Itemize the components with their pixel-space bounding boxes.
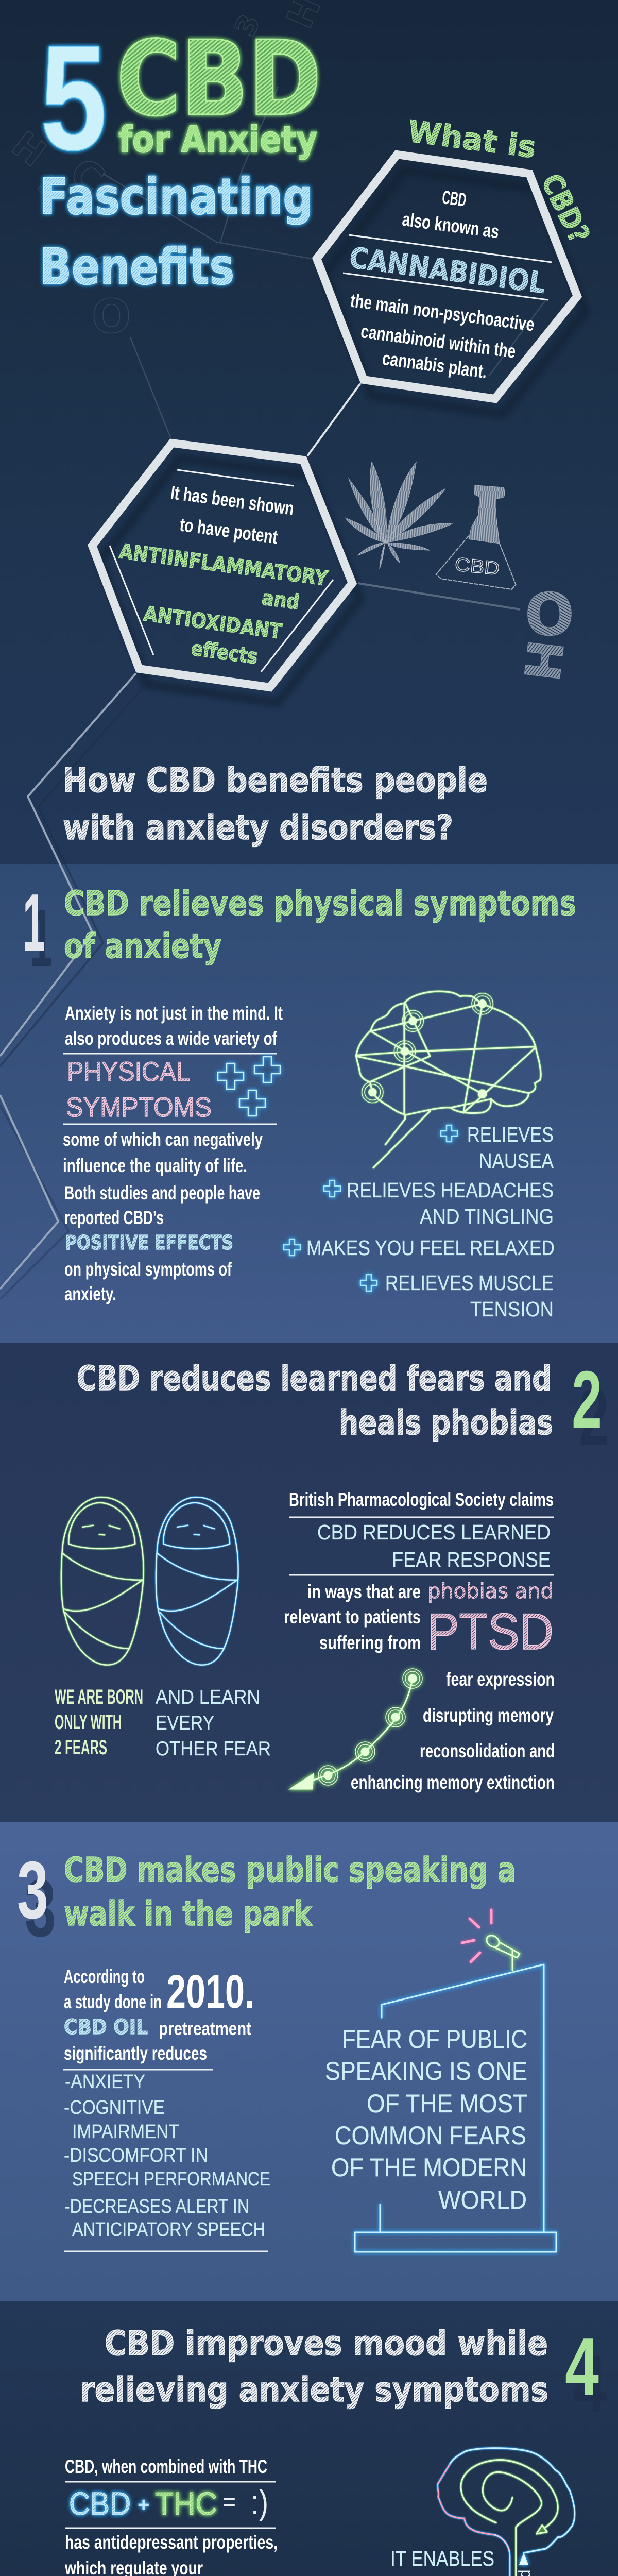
number 3: 3	[17, 1845, 48, 1936]
baby captions: ONLY WITH	[55, 1711, 122, 1734]
relief list: RELIEVES HEADACHES	[347, 1178, 554, 1202]
baby captions: OTHER FEAR	[156, 1738, 271, 1760]
title fascinating: Fascinating	[40, 168, 313, 226]
number 1: 1	[23, 877, 45, 968]
definition text: CANNABIDIOL	[348, 241, 547, 300]
icon: green swaddled baby	[61, 1497, 144, 1665]
number 1: 1	[30, 893, 53, 984]
reduced symptoms list: -DECREASES ALERT IN	[64, 2196, 249, 2217]
number 4: 4	[573, 2339, 607, 2430]
panel: header and what is CBD	[0, 0, 618, 864]
baby captions	[55, 1686, 271, 1760]
British Pharmacological Society claim	[284, 1489, 554, 1660]
number 4: 4	[565, 2321, 599, 2412]
number 2: 2	[572, 1354, 602, 1445]
CBD plus THC equation: CBD, when combined with THC	[65, 2456, 267, 2477]
relief list: AND TINGLING	[420, 1205, 554, 1228]
hexagon shadows	[100, 170, 585, 703]
reduced symptoms list: -DISCOMFORT IN	[64, 2145, 208, 2166]
body text 1: some of which can negatively	[63, 1129, 263, 1150]
relief list: TENSION	[470, 1297, 554, 1321]
potent effects text: ANTIINFLAMMATORY	[118, 539, 330, 591]
British Pharmacological Society claim: phobias and	[427, 1580, 554, 1603]
icon: brain with mood pathway	[438, 2448, 575, 2576]
heading 2: heals phobias	[339, 1403, 553, 1443]
relief list	[284, 1123, 555, 1321]
heading 1: of anxiety	[64, 926, 221, 966]
icon: CBD oil flask: CBD	[454, 553, 501, 579]
definition text: cannabinoid within the	[359, 320, 517, 362]
icon: podium	[355, 1964, 556, 2252]
baby captions: AND LEARN	[156, 1686, 260, 1708]
faint molecule letters	[4, 0, 329, 344]
body text 1: influence the quality of life.	[63, 1155, 247, 1176]
study text: a study done in	[64, 1991, 162, 2012]
definition text: the main non-psychoactive	[349, 290, 536, 335]
antidepressant text: has antidepressant properties,	[65, 2532, 278, 2553]
title for anxiety: for Anxiety	[118, 118, 317, 161]
British Pharmacological Society claim: FEAR RESPONSE	[392, 1548, 551, 1571]
reduced symptoms list	[64, 2071, 270, 2241]
potent effects text: to have potent	[179, 514, 279, 548]
CBD plus THC equation: THC	[155, 2486, 217, 2522]
what is CBD heading: CBD?	[534, 169, 596, 248]
icon: blue swaddled baby	[156, 1497, 238, 1665]
title CBD: CBD	[116, 19, 321, 139]
podium fear text: OF THE MOST	[367, 2089, 527, 2118]
antidepressant text	[64, 2532, 278, 2576]
heading 2	[77, 1359, 553, 1443]
panel: benefit 2 learned fears	[0, 1343, 618, 1822]
hydroxyl group OH: H	[512, 637, 573, 684]
body text 1: on physical symptoms of	[64, 1259, 232, 1280]
CBD plus THC equation: CBD	[69, 2486, 131, 2522]
icon: cannabis leaf	[345, 462, 452, 569]
mood arrows	[519, 2553, 530, 2576]
memory effects timeline: fear expression	[446, 1669, 555, 1690]
icon: microphone	[485, 1933, 520, 1970]
connector between hexagons	[307, 383, 360, 456]
main question heading: with anxiety disorders?	[63, 808, 453, 848]
British Pharmacological Society claim: relevant to patients	[284, 1606, 421, 1628]
panel: benefit 4 mood	[0, 2301, 618, 2576]
faint molecule letters: 3	[32, 169, 65, 205]
green spirals and arrows	[461, 2460, 558, 2576]
CBD plus THC equation: =	[222, 2488, 236, 2516]
baby captions: WE ARE BORN	[55, 1686, 143, 1708]
hexagon inner rules	[110, 470, 333, 672]
body text 1: Both studies and people have	[64, 1182, 260, 1204]
reduced symptoms list: ANTICIPATORY SPEECH	[72, 2219, 265, 2241]
icon: CBD oil flask	[436, 485, 516, 589]
British Pharmacological Society claim: PTSD	[427, 1603, 554, 1660]
relief list: MAKES YOU FEEL RELAXED	[306, 1236, 555, 1260]
definition text: CBD	[441, 187, 468, 211]
glowing timeline	[291, 1669, 422, 1789]
memory effects timeline: reconsolidation and	[420, 1740, 555, 1761]
number 1	[23, 877, 53, 984]
study text: significantly reduces	[64, 2043, 207, 2064]
hydroxyl group OH: O	[525, 582, 574, 649]
heading 3	[64, 1850, 516, 1934]
body text 1: also produces a wide variety of	[65, 1028, 278, 1049]
heading 4: CBD improves mood while	[105, 2324, 548, 2363]
icon: brain network	[356, 991, 541, 1168]
serotonin text	[307, 2547, 494, 2576]
main question heading	[63, 760, 488, 848]
number 3: 3	[25, 1863, 56, 1954]
podium fear text: WORLD	[438, 2185, 527, 2214]
brain outline	[438, 2448, 575, 2576]
faint molecule letters: H	[74, 249, 123, 291]
podium fear text: COMMON FEARS	[335, 2121, 526, 2150]
podium fear text: FEAR OF PUBLIC	[342, 2025, 527, 2054]
what is CBD heading	[406, 113, 596, 248]
relief list: RELIEVES MUSCLE	[385, 1271, 554, 1295]
title	[40, 14, 321, 296]
title number 5: 5	[40, 14, 107, 181]
potent effects text: It has been shown	[169, 482, 295, 519]
plus bullets	[284, 1125, 457, 1291]
baby captions: EVERY	[156, 1712, 214, 1734]
potent effects text: effects	[190, 637, 259, 669]
faint molecule letters: O	[92, 290, 131, 344]
heading 3: walk in the park	[64, 1894, 313, 1934]
molecule chain lines	[0, 673, 146, 1299]
memory effects timeline	[291, 1669, 555, 1793]
body text 1: anxiety.	[64, 1283, 116, 1304]
definition text: also known as	[401, 209, 500, 242]
icon: glowing plus signs	[218, 1057, 280, 1116]
main question heading: How CBD benefits people	[63, 760, 488, 800]
podium fear text: OF THE MODERN	[331, 2153, 527, 2182]
British Pharmacological Society claim: CBD REDUCES LEARNED	[317, 1520, 551, 1544]
body text 1: SYMPTOMS	[66, 1092, 212, 1123]
faint molecule letters: C	[61, 149, 113, 204]
panel: benefit 3 public speaking	[0, 1822, 618, 2301]
British Pharmacological Society claim: in ways that are	[307, 1581, 421, 1602]
bond to hydroxyl group	[358, 583, 520, 609]
hexagon: CBD definition	[317, 155, 577, 399]
reduced symptoms list: -COGNITIVE	[64, 2097, 165, 2119]
heading 3: CBD makes public speaking a	[64, 1850, 516, 1890]
potent effects text: ANTIOXIDANT	[142, 602, 283, 644]
potent effects text: and	[261, 586, 301, 615]
baby captions: 2 FEARS	[55, 1736, 107, 1759]
study text: CBD OIL	[64, 2015, 148, 2039]
body text 1: reported CBD’s	[64, 1207, 164, 1228]
definition text: cannabis plant.	[381, 348, 488, 382]
memory effects timeline: disrupting memory	[423, 1705, 554, 1726]
memory effects timeline: enhancing memory extinction	[351, 1772, 555, 1793]
panel: benefit 1 physical symptoms	[0, 673, 618, 1343]
icon: sound rays	[462, 1910, 491, 1962]
body text 1	[63, 1003, 283, 1304]
podium fear text	[325, 2025, 527, 2214]
CBD plus THC equation: +	[138, 2494, 149, 2516]
study text	[63, 1965, 276, 2268]
faint molecule bonds	[103, 87, 546, 437]
faint molecule letters: 3	[228, 10, 267, 42]
relief list: RELIEVES	[467, 1123, 554, 1146]
heading 1	[64, 884, 576, 966]
study text: 2010.	[166, 1965, 254, 2018]
serotonin text: IT ENABLES	[390, 2547, 494, 2570]
heading 4: relieving anxiety symptoms	[80, 2370, 548, 2410]
body text 1: Anxiety is not just in the mind. It	[65, 1003, 283, 1024]
hexagon: anti-inflammatory	[92, 443, 352, 687]
heading 4	[80, 2324, 548, 2410]
relief list: NAUSEA	[479, 1149, 554, 1173]
study text: pretreatment	[159, 2018, 251, 2039]
hydroxyl group OH	[512, 582, 574, 684]
potent effects text	[118, 482, 330, 669]
definition text	[343, 187, 552, 382]
British Pharmacological Society claim: suffering from	[319, 1632, 421, 1653]
reduced symptoms list: -ANXIETY	[65, 2071, 145, 2093]
body text 1: POSITIVE EFFECTS	[65, 1231, 233, 1254]
faint molecule letters: H	[4, 123, 54, 175]
study text: According to	[64, 1966, 145, 1987]
reduced symptoms list: SPEECH PERFORMANCE	[72, 2168, 270, 2190]
CBD plus THC equation: :)	[251, 2483, 268, 2522]
podium fear text: SPEAKING IS ONE	[325, 2057, 527, 2086]
reduced symptoms list: IMPAIRMENT	[72, 2121, 179, 2143]
what is CBD heading: What is	[406, 113, 538, 165]
title benefits: Benefits	[40, 238, 234, 296]
body text 1: PHYSICAL	[67, 1057, 190, 1087]
CBD plus THC equation	[65, 2456, 276, 2528]
